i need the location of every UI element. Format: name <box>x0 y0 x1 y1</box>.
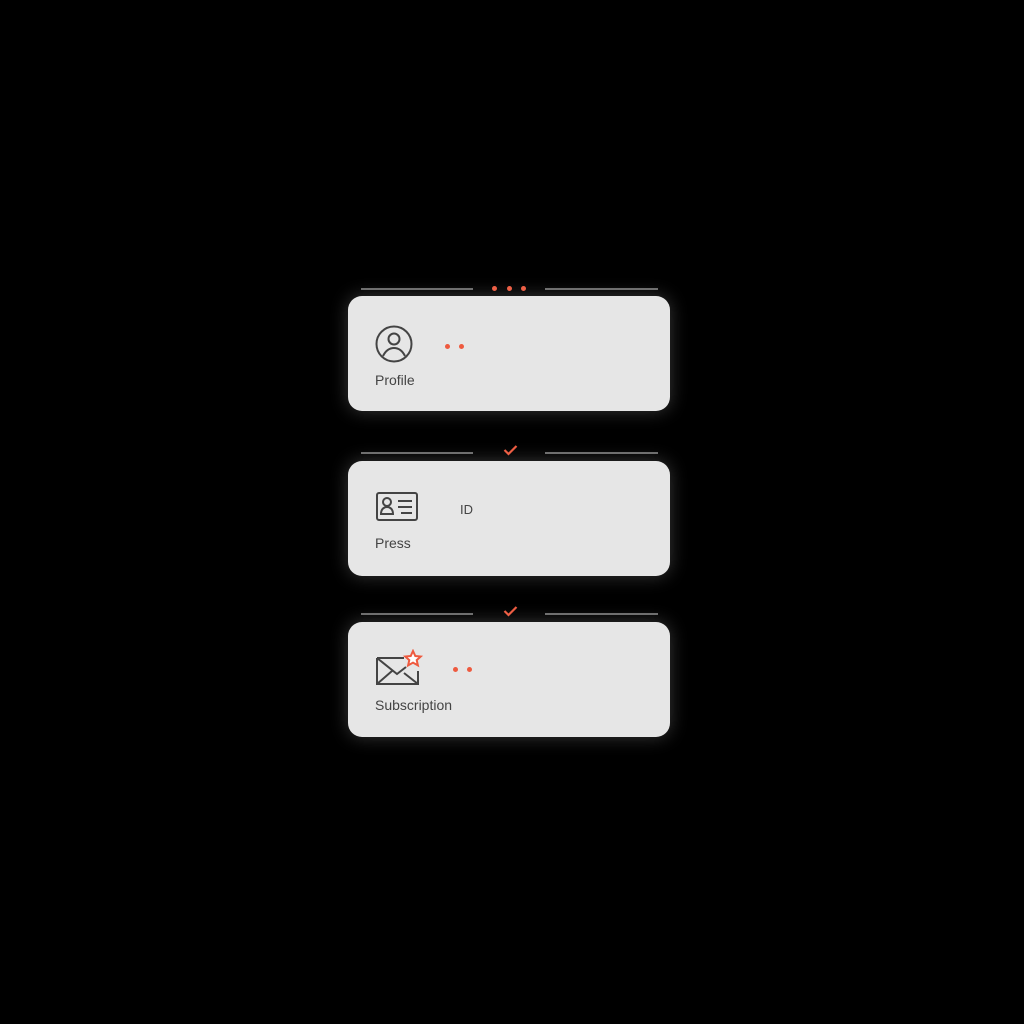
panel: press <box>348 461 670 576</box>
panel: profile <box>348 296 670 411</box>
connector: top <box>361 286 658 291</box>
label: press: Press <box>375 535 411 551</box>
label: subscription: Subscription <box>375 697 452 713</box>
panel: press: ID <box>460 502 473 517</box>
icon: user <box>376 326 412 362</box>
label: profile: Profile <box>375 372 415 388</box>
icon: id card <box>376 492 418 521</box>
connector: check 2 <box>361 606 658 616</box>
panel: subscription <box>348 622 670 737</box>
connector: check 1 <box>361 445 658 456</box>
icon: envelope star <box>376 649 423 685</box>
